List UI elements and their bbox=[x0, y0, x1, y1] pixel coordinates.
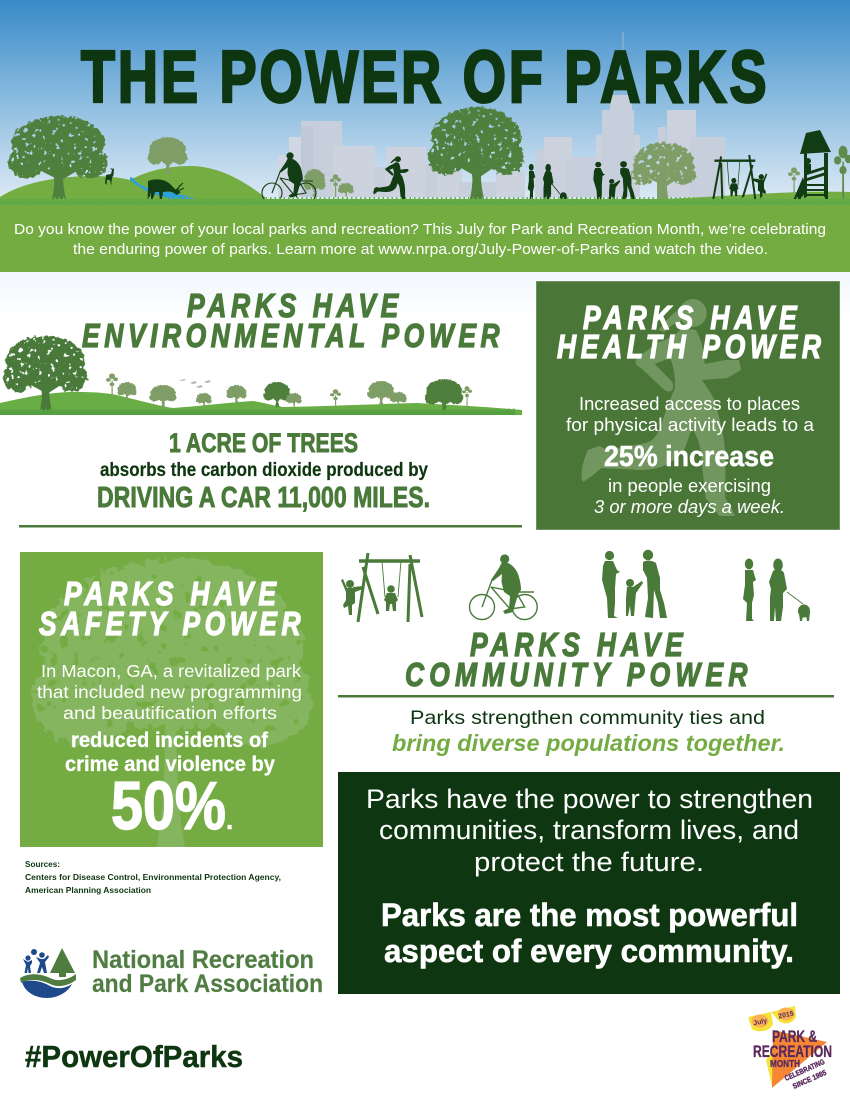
people: women with dog bbox=[528, 164, 567, 202]
tree: left large bbox=[8, 116, 108, 200]
hills bbox=[0, 166, 265, 206]
body: . bbox=[226, 805, 233, 835]
heading bbox=[557, 300, 821, 366]
stat: 1 acre: DRIVING A CAR 11,000 MILES. bbox=[97, 482, 430, 514]
sources bbox=[25, 859, 281, 895]
tree: hilltop bbox=[148, 137, 187, 174]
sunglasses: 2015 bbox=[778, 1010, 795, 1021]
badge text: SINCE 1985 bbox=[791, 1068, 828, 1091]
deer bbox=[105, 168, 114, 186]
river bbox=[130, 177, 206, 203]
statement: communities, transform lives, and bbox=[379, 815, 799, 845]
heading bbox=[405, 627, 748, 694]
sunglasses bbox=[748, 1006, 796, 1031]
sky bbox=[0, 0, 850, 206]
grass bbox=[0, 410, 515, 415]
logo wordmark: and Park Association bbox=[92, 970, 323, 998]
body: crime and violence by bbox=[65, 753, 275, 776]
statement: Parks have the power to strengthen bbox=[366, 784, 813, 814]
hashtag: #PowerOfParks bbox=[25, 1039, 243, 1074]
grass bbox=[0, 199, 850, 206]
body: Parks strengthen community ties and bbox=[410, 707, 765, 729]
sapling right bbox=[788, 167, 800, 193]
page background bbox=[0, 272, 850, 322]
playhouse bbox=[792, 130, 831, 204]
people: family bbox=[593, 161, 636, 203]
stat: 1 acre bbox=[97, 428, 430, 514]
body: reduced incidents of bbox=[71, 729, 269, 752]
tree: central large bbox=[428, 107, 524, 199]
heading bbox=[39, 576, 301, 643]
swing set bbox=[713, 155, 767, 204]
badge text: MONTH bbox=[770, 1059, 800, 1070]
intro text: Do you know the power of your local parks and recreation? This July for Park and Recreation Month, we’re celebrating bbox=[14, 222, 826, 238]
body: Increased access to places bbox=[579, 394, 800, 414]
fifty percent: 50% bbox=[111, 768, 226, 844]
panel: closing statement bbox=[338, 772, 840, 994]
cyclist bbox=[262, 152, 316, 203]
panel: community power bbox=[338, 550, 834, 756]
heading: ENVIRONMENTAL POWER bbox=[82, 318, 500, 355]
stat: 1 acre: 1 ACRE OF TREES bbox=[169, 428, 358, 458]
heading bbox=[82, 288, 500, 355]
body: 3 or more days a week. bbox=[594, 497, 785, 517]
body: that included new programming bbox=[37, 682, 302, 702]
logo wordmark: National Recreation bbox=[92, 946, 314, 974]
intro text bbox=[14, 222, 826, 258]
tree: faded double bbox=[631, 143, 696, 200]
statement: protect the future. bbox=[474, 847, 704, 877]
icon: family bbox=[602, 550, 667, 618]
heading: HEALTH POWER bbox=[557, 329, 821, 366]
city skyline bbox=[278, 32, 725, 197]
body: 25% increase bbox=[604, 441, 774, 473]
heading: SAFETY POWER bbox=[39, 606, 301, 643]
bold statement: aspect of every community. bbox=[384, 933, 794, 969]
logo icon bbox=[20, 948, 76, 998]
tree: large bbox=[3, 336, 87, 411]
logo wordmark bbox=[92, 946, 323, 998]
intro text: the enduring power of parks. Learn more at www.nrpa.org/July-Power-of-Parks and watch the video. bbox=[73, 242, 768, 258]
icon: cyclist bbox=[470, 554, 537, 620]
sources: Centers for Disease Control, Environmental Protection Agency, bbox=[25, 872, 281, 882]
badge text: PARK & bbox=[772, 1027, 817, 1046]
body bbox=[566, 394, 815, 517]
intro band bbox=[0, 205, 850, 272]
panel: environmental power bbox=[0, 288, 522, 528]
landscape bbox=[0, 336, 522, 415]
badge text: CELEBRATING bbox=[783, 1057, 826, 1083]
bold statement: Parks are the most powerful bbox=[381, 897, 798, 933]
body: in people exercising bbox=[608, 476, 771, 496]
panel: safety power bbox=[20, 552, 323, 847]
icon: women with dog bbox=[743, 558, 810, 621]
sources: Sources: bbox=[25, 859, 60, 869]
heading: PARKS HAVE bbox=[187, 288, 399, 325]
header scene bbox=[0, 0, 850, 272]
panel: health power bbox=[536, 282, 840, 530]
statement bbox=[366, 784, 813, 877]
sunglasses: July bbox=[753, 1018, 768, 1027]
elk bbox=[148, 179, 184, 200]
tree: small faded left bbox=[303, 169, 326, 197]
body: and beautification efforts bbox=[63, 703, 277, 723]
body bbox=[37, 661, 302, 844]
birds bbox=[179, 379, 211, 388]
title: THE POWER OF PARKS bbox=[81, 36, 767, 118]
body: bring diverse populations together. bbox=[392, 730, 785, 756]
icon: swing set bbox=[341, 553, 422, 622]
tree: far right bbox=[834, 146, 850, 201]
heading: PARKS HAVE bbox=[583, 300, 798, 337]
body: In Macon, GA, a revitalized park bbox=[41, 661, 301, 681]
tree: small bbox=[338, 183, 354, 197]
badge: park and recreation month bbox=[748, 1006, 832, 1091]
sapling bbox=[330, 174, 341, 197]
small trees bbox=[106, 373, 472, 413]
sources: American Planning Association bbox=[25, 885, 151, 895]
stat: 1 acre: absorbs the carbon dioxide produced by bbox=[100, 460, 428, 481]
body bbox=[392, 707, 785, 756]
heading: COMMUNITY POWER bbox=[405, 657, 748, 694]
logo: NRPA bbox=[20, 946, 323, 998]
body: for physical activity leads to a bbox=[566, 415, 815, 435]
right hill bbox=[660, 192, 850, 206]
runner watermark bbox=[582, 299, 741, 516]
heading: PARKS HAVE bbox=[64, 576, 277, 613]
heading: PARKS HAVE bbox=[470, 627, 684, 664]
runner bbox=[373, 156, 409, 202]
bold statement bbox=[381, 897, 798, 969]
tree watermark bbox=[32, 559, 312, 847]
badge text bbox=[753, 1027, 832, 1091]
